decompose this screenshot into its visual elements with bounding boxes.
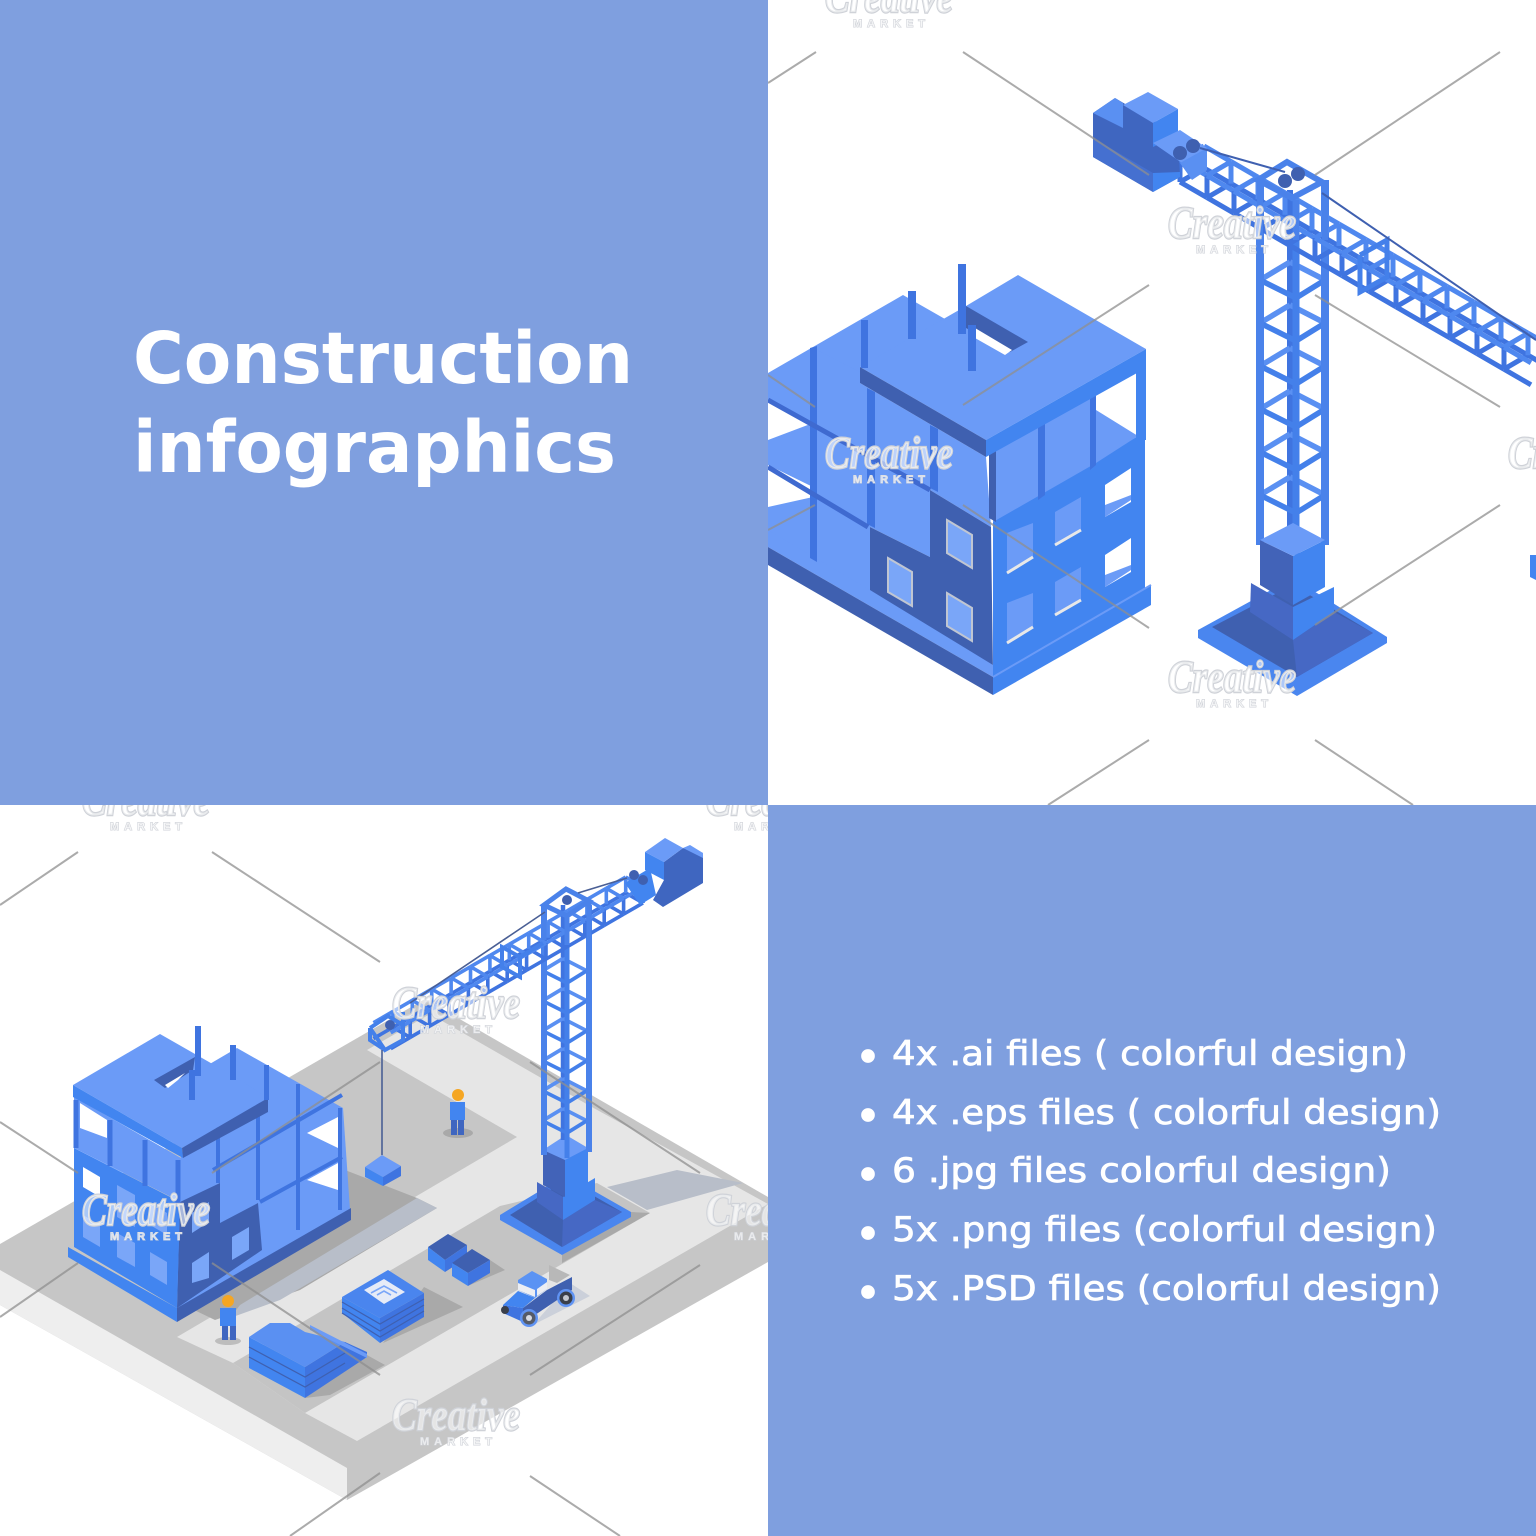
illustration: isometric building close-up [768,264,1151,695]
crane hook load [365,1155,401,1186]
file format list: 4x .ai files ( colorful design) [892,1034,1408,1074]
illustration: worker near building [215,1295,241,1345]
illustration: pickup truck [501,1265,590,1327]
site crane cables [382,878,627,1155]
title: Construction [133,317,633,400]
file format list: 5x .PSD files (colorful design) [892,1269,1441,1309]
illustration: crane close-up [1093,92,1536,696]
illustration: construction site platform [0,999,768,1500]
illustration: worker near crane load [443,1089,473,1138]
counterweight [1093,92,1305,192]
illustration: crates [428,1234,490,1286]
site crane top ring [544,889,589,945]
site crane jib [370,877,643,1050]
panel: file list background [768,805,1536,1536]
illustration: site crane [365,838,703,1255]
watermarks: lower left quadrant [82,805,768,1446]
file format list [862,1034,1441,1309]
illustration: site building [68,1026,351,1322]
title: infographics [133,406,616,489]
panel: title background [0,0,768,805]
watermarks: upper right quadrant [825,0,1536,710]
crane mast [1260,180,1325,555]
illustration: brick pile [249,1323,367,1398]
crane top ring [1258,162,1325,240]
illustration: stack of materials [342,1270,424,1343]
crane concrete base [1198,523,1536,696]
crane jib lattice [1180,146,1536,385]
file format list: 6 .jpg files colorful design) [892,1151,1391,1191]
title [133,317,633,489]
site crane mast [543,905,589,1158]
site crane base [500,1135,631,1255]
site crane counterweight [385,838,703,1030]
crane cables [1200,148,1536,340]
file format list: 4x .eps files ( colorful design) [892,1093,1441,1133]
file format list: 5x .png files (colorful design) [892,1210,1437,1250]
